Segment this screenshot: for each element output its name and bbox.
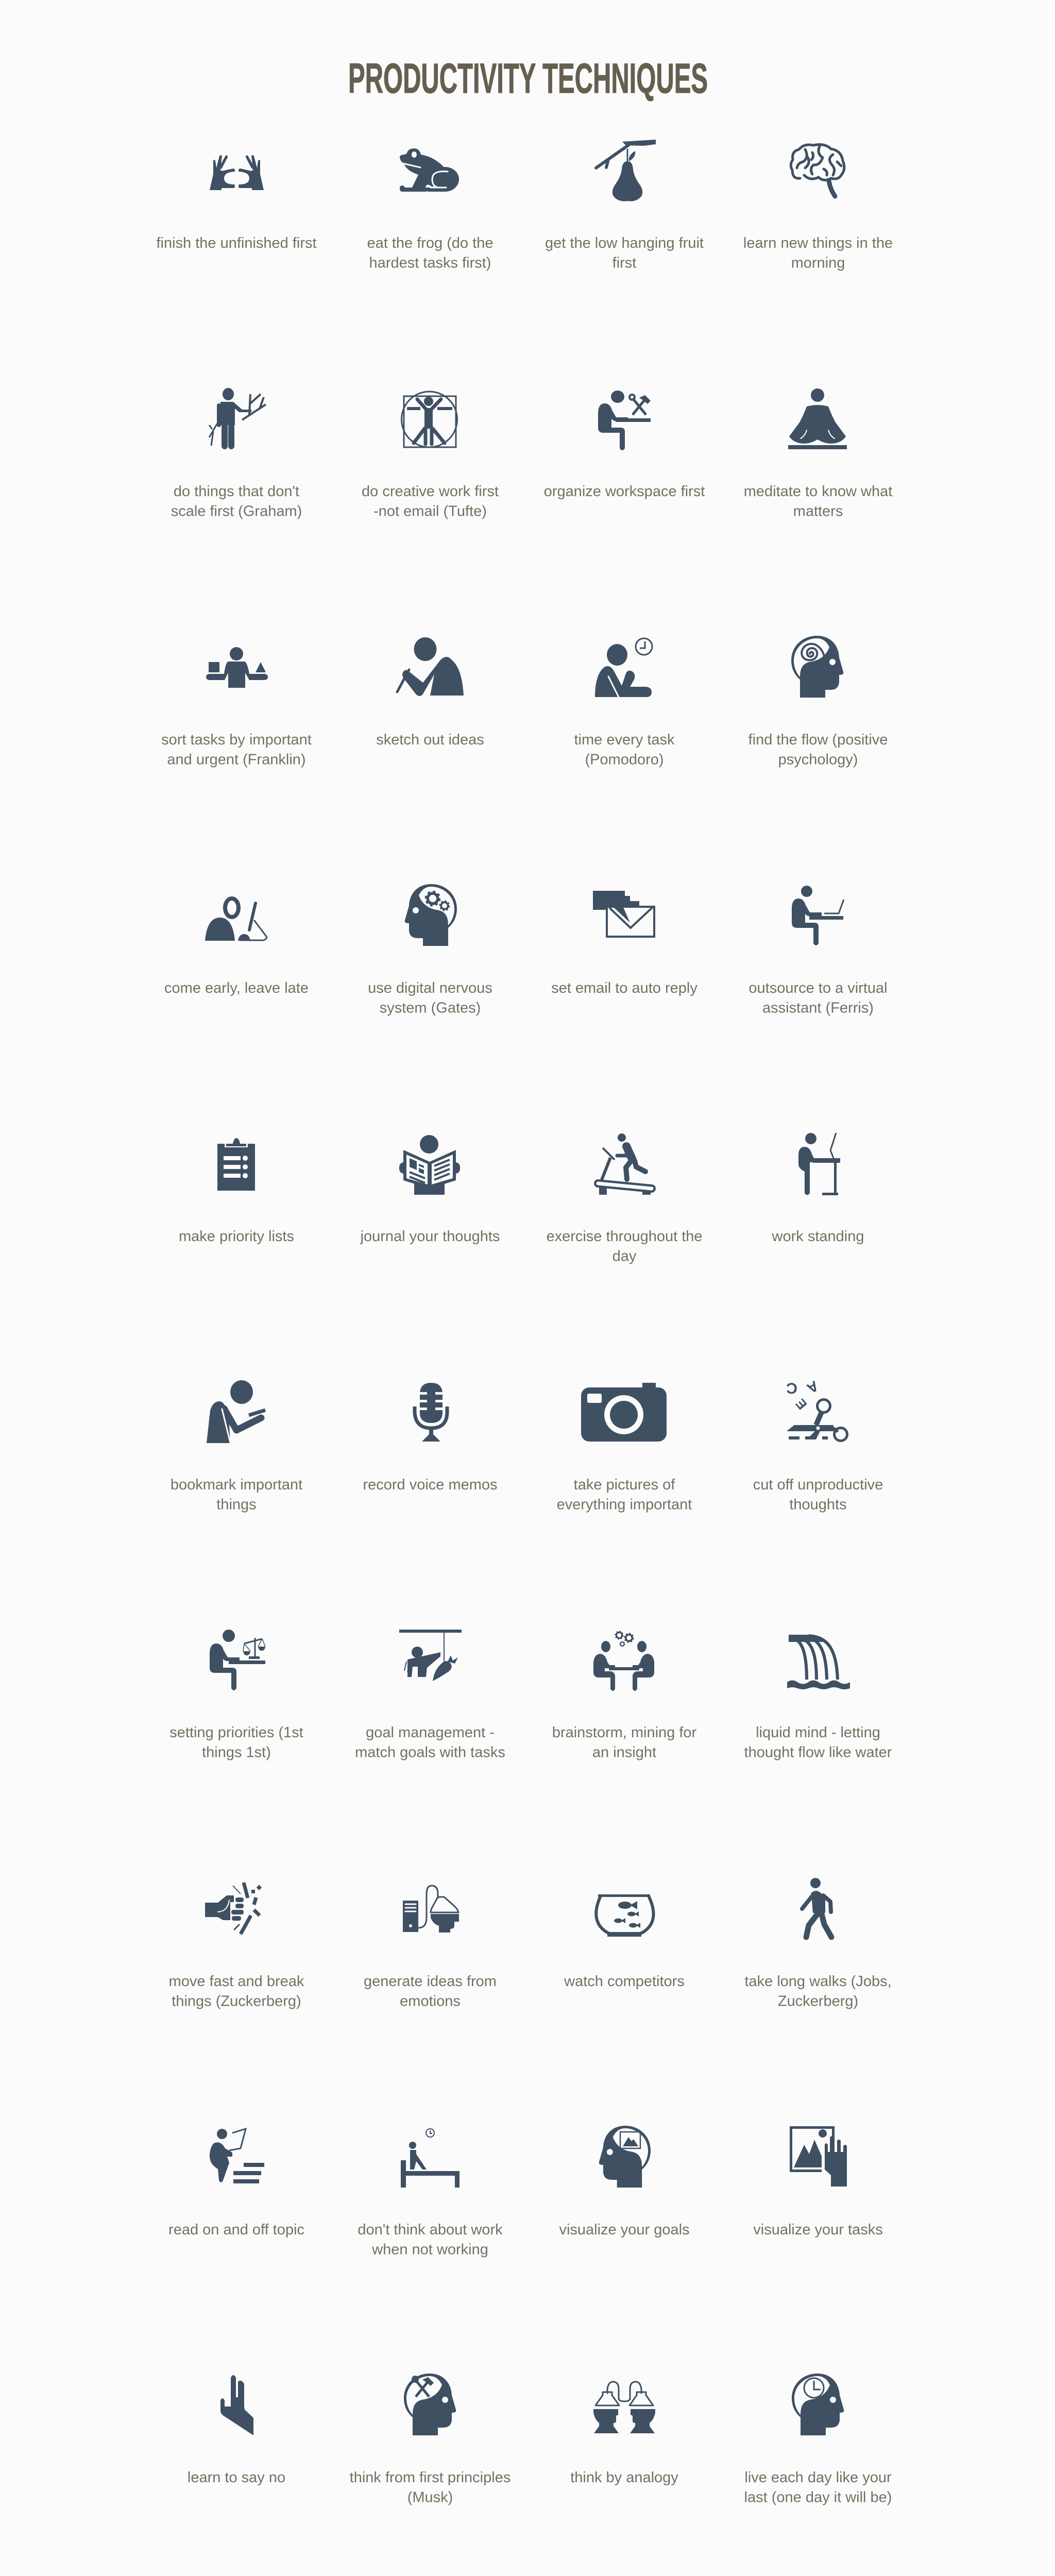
- icon: seated person with tools: [598, 391, 651, 450]
- icon: reader with stack of books: [210, 2129, 264, 2183]
- panel: meditate to know what matters: [744, 388, 892, 520]
- panel: learn new things in the morning: [743, 145, 893, 272]
- caption: think from first principles: [350, 2469, 511, 2486]
- panel: think by analogy: [570, 2382, 678, 2486]
- caption: time every task: [574, 732, 675, 748]
- icon: clipboard: [217, 1138, 255, 1191]
- panel: don't think about work when not working: [358, 2129, 503, 2258]
- icon: hands: [210, 155, 264, 190]
- icon: person on bed with clock: [401, 2129, 460, 2188]
- caption: finish the unfinished first: [156, 235, 317, 251]
- caption: get the low hanging fruit: [545, 235, 704, 251]
- panel: find the flow: [748, 636, 888, 768]
- panel: take pictures of everything important: [557, 1383, 692, 1513]
- icon: fishbowl: [596, 1894, 654, 1937]
- caption: setting priorities (1st: [169, 1724, 303, 1741]
- panel: setting priorities: [169, 1630, 303, 1761]
- icon: scissors cutting letters: [786, 1378, 847, 1440]
- caption: scale first (Graham): [171, 503, 302, 520]
- icon: vitruvian man: [402, 392, 457, 447]
- icon: person chasing carrot: [399, 1630, 462, 1681]
- panel: visualize your goals: [559, 2126, 690, 2238]
- caption: do things that don't: [174, 483, 299, 500]
- icon: seated person with scales: [210, 1630, 265, 1690]
- icon: microphone: [415, 1383, 447, 1442]
- caption: take pictures of: [574, 1477, 675, 1493]
- caption: eat the frog (do the: [367, 235, 494, 251]
- caption: last (one day it will be): [744, 2489, 892, 2506]
- panel: use digital nervous system: [368, 884, 492, 1016]
- caption: outsource to a virtual: [748, 980, 888, 996]
- panel: journal your thoughts: [360, 1135, 500, 1245]
- caption: -not email (Tufte): [373, 503, 487, 520]
- caption: sort tasks by important: [161, 732, 312, 748]
- panel: live each day like your last: [744, 2374, 892, 2506]
- caption: bookmark important: [171, 1477, 302, 1493]
- panel: come early, leave late: [164, 899, 309, 996]
- panel: finish the unfinished first: [156, 155, 317, 251]
- icon: hand holding picture: [791, 2128, 847, 2187]
- panel: take long walks: [744, 1878, 892, 2010]
- panel: get the low hanging fruit first: [545, 140, 704, 272]
- panel: read on and off topic: [168, 2129, 304, 2238]
- caption: goal management -: [366, 1724, 495, 1741]
- caption: read on and off topic: [168, 2222, 304, 2238]
- panel: brainstorm, mining for an insight: [552, 1632, 697, 1761]
- caption: generate ideas from: [364, 1973, 497, 1990]
- caption: use digital nervous: [368, 980, 492, 996]
- caption: sketch out ideas: [376, 732, 484, 748]
- caption: first: [612, 255, 636, 272]
- caption: set email to auto reply: [551, 980, 697, 996]
- caption: things 1st): [202, 1744, 271, 1761]
- icon: person at standing desk: [798, 1133, 840, 1195]
- panel: goal management: [355, 1630, 505, 1761]
- icon: meditating person: [788, 388, 847, 449]
- icon: person at laptop: [792, 886, 844, 945]
- caption: things: [216, 1497, 257, 1513]
- caption: emotions: [400, 1993, 461, 2010]
- icon: person weighing shapes: [206, 647, 268, 688]
- caption: journal your thoughts: [360, 1228, 500, 1245]
- icon: camera: [581, 1383, 667, 1442]
- panel: organize workspace first: [544, 391, 705, 500]
- panel: liquid mind: [744, 1635, 892, 1761]
- icon: person on treadmill: [598, 1133, 652, 1195]
- panel: do creative work first: [362, 392, 499, 520]
- icon: person sketching: [397, 637, 464, 696]
- caption: morning: [791, 255, 845, 272]
- icon: computer connected to head: [403, 1886, 459, 1933]
- caption: thought flow like water: [744, 1744, 892, 1761]
- icon: scissors cutting letters: C: [786, 1380, 797, 1396]
- caption: liquid mind - letting: [756, 1724, 880, 1741]
- panel: bookmark important things: [171, 1380, 302, 1513]
- caption: learn new things in the: [743, 235, 893, 251]
- panel: eat the frog: [367, 148, 494, 272]
- caption: exercise throughout the: [546, 1228, 703, 1245]
- caption: things (Zuckerberg): [172, 1993, 301, 2010]
- caption: make priority lists: [179, 1228, 294, 1245]
- panel: work standing: [772, 1133, 864, 1245]
- panel: generate ideas from emotions: [364, 1886, 497, 2010]
- panel: make priority lists: [179, 1138, 294, 1245]
- icon: scissors cutting letters: E: [792, 1396, 810, 1413]
- panel: visualize your tasks: [753, 2128, 883, 2238]
- icon: figure with ring and pendulum: [205, 899, 267, 941]
- panel: set email to auto reply: [551, 891, 697, 996]
- caption: come early, leave late: [164, 980, 309, 996]
- icon: walking person: [802, 1878, 831, 1937]
- panel: move fast and break things: [169, 1883, 304, 2010]
- panel: do things that don't scale first: [171, 388, 302, 520]
- icon: head with tools: [404, 2374, 456, 2435]
- panel: sketch out ideas: [376, 637, 484, 748]
- icon: head with spiral: [791, 636, 843, 698]
- caption: psychology): [778, 752, 858, 768]
- caption: matters: [793, 503, 843, 520]
- caption: Zuckerberg): [778, 1993, 858, 2010]
- caption: cut off unproductive: [753, 1477, 883, 1493]
- caption: watch competitors: [564, 1973, 685, 1990]
- icon: envelope with letters: [593, 891, 654, 937]
- caption: brainstorm, mining for: [552, 1724, 697, 1741]
- caption: (Musk): [407, 2489, 453, 2506]
- caption: hardest tasks first): [369, 255, 491, 272]
- icon: two people with gears: [593, 1632, 654, 1691]
- caption: everything important: [557, 1497, 692, 1513]
- caption: record voice memos: [363, 1477, 498, 1493]
- caption: and urgent (Franklin): [167, 752, 306, 768]
- panel: outsource to a virtual assistant: [748, 886, 888, 1016]
- icon: head with gears: [405, 884, 457, 946]
- caption: live each day like your: [744, 2469, 892, 2486]
- title: PRODUCTIVITY TECHNIQUES: [348, 55, 708, 102]
- icon: head with clock: [792, 2374, 844, 2435]
- icon: person with marker: [207, 1380, 265, 1443]
- caption: think by analogy: [570, 2469, 678, 2486]
- caption: match goals with tasks: [355, 1744, 505, 1761]
- caption: visualize your tasks: [753, 2222, 883, 2238]
- panel: watch competitors: [564, 1894, 685, 1990]
- icon: man with branches: [209, 388, 266, 446]
- panel: sort tasks by important and urgent: [161, 647, 312, 768]
- caption: visualize your goals: [559, 2222, 690, 2238]
- panel: time every task: [574, 638, 675, 768]
- caption: (Pomodoro): [585, 752, 664, 768]
- icon: person with clock: [595, 638, 652, 697]
- panel: think from first principles: [350, 2374, 511, 2506]
- panel: learn to say no: [188, 2375, 285, 2486]
- caption: work standing: [772, 1228, 864, 1245]
- caption: when not working: [371, 2242, 488, 2258]
- icon: head with picture: [599, 2126, 651, 2188]
- caption: thoughts: [789, 1497, 847, 1513]
- caption: learn to say no: [188, 2469, 285, 2486]
- icon: two heads with flasks: [593, 2382, 655, 2433]
- panel: record voice memos: [363, 1383, 498, 1493]
- icon: pear on a branch: [596, 140, 656, 201]
- caption: find the flow (positive: [748, 732, 888, 748]
- icon: scissors cutting letters: A: [804, 1378, 821, 1397]
- panel: exercise throughout the day: [546, 1133, 703, 1265]
- icon: person reading newspaper: [399, 1135, 460, 1195]
- caption: assistant (Ferris): [762, 1000, 874, 1016]
- icon: waterfall: [787, 1635, 850, 1689]
- caption: do creative work first: [362, 483, 499, 500]
- caption: don't think about work: [358, 2222, 503, 2238]
- caption: organize workspace first: [544, 483, 705, 500]
- caption: meditate to know what: [744, 483, 892, 500]
- icon: frog: [400, 148, 459, 192]
- caption: an insight: [592, 1744, 656, 1761]
- caption: take long walks (Jobs,: [744, 1973, 892, 1990]
- caption: day: [612, 1248, 637, 1265]
- icon: brain: [791, 145, 844, 196]
- panel: cut off unproductive thoughts: [753, 1378, 883, 1513]
- caption: system (Gates): [380, 1000, 481, 1016]
- caption: move fast and break: [169, 1973, 304, 1990]
- icon: fist breaking through: [205, 1883, 262, 1934]
- icon: raised hand: [220, 2375, 253, 2435]
